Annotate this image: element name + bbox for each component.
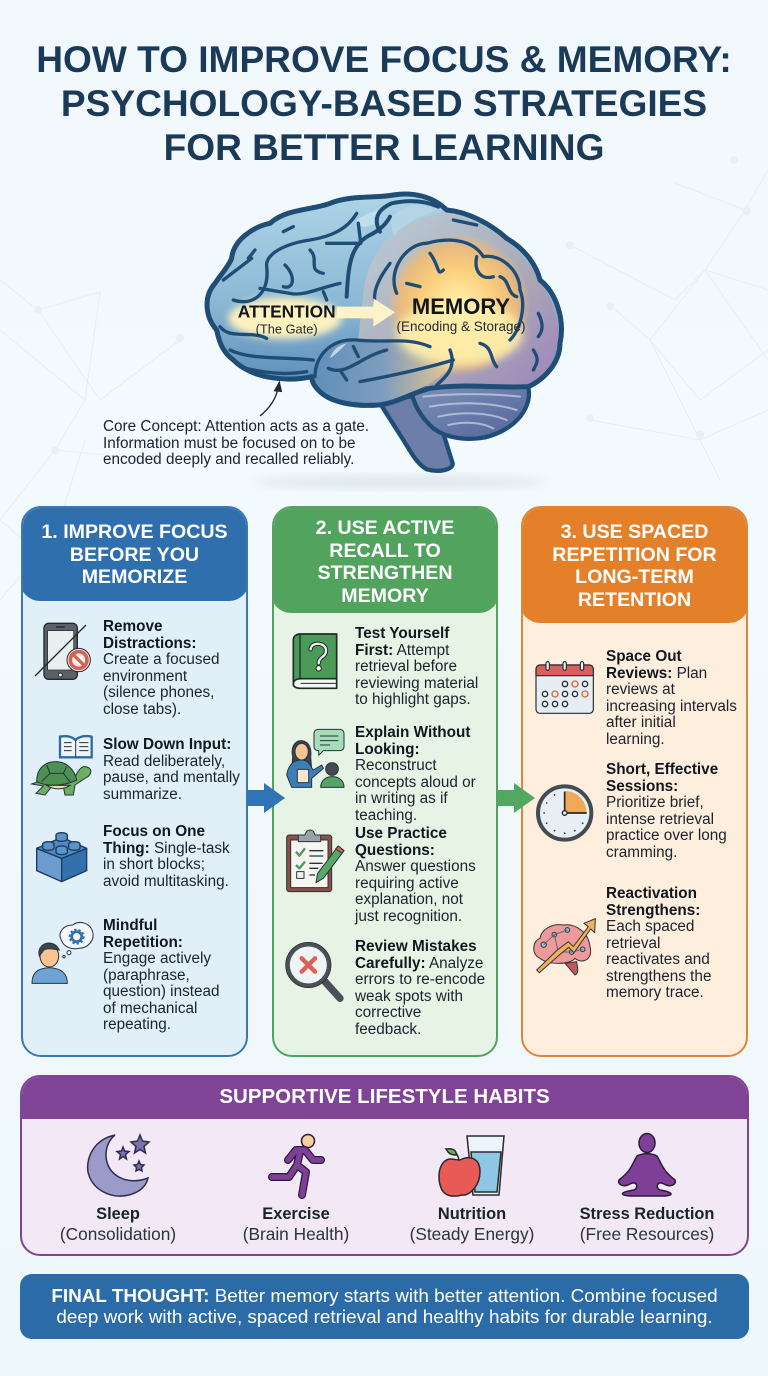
text: short effective sessions: practice over long [606, 827, 727, 844]
text: review mistakes [355, 938, 485, 1038]
icon: magnifier with x [286, 942, 340, 998]
text: short effective sessions: intense retrieval [606, 810, 714, 828]
heading: improve focus: BEFORE YOU [70, 544, 199, 566]
text: mindful repetition: Repetition: [103, 934, 183, 950]
attention label: (The Gate) [256, 321, 318, 336]
icon: moon and stars [88, 1135, 149, 1196]
core concept text: encoded deeply and recalled reliably. [103, 451, 354, 468]
text: short effective sessions: Short, Effective [606, 761, 718, 778]
text: explain without looking [355, 724, 476, 824]
icon: runner [272, 1134, 321, 1195]
attention label [238, 301, 336, 336]
brain illustration [204, 192, 564, 490]
text: test yourself [355, 625, 478, 708]
text: space out reviews: Space Out [606, 648, 682, 665]
icon: question book [293, 634, 337, 688]
text: sleep: Sleep [96, 1205, 140, 1223]
text: mindful repetition: Engage actively [103, 950, 211, 967]
icon: turtle with book [32, 736, 92, 795]
cerebrum [207, 194, 561, 405]
heading: active recall: STRENGTHEN [318, 562, 452, 584]
background network pattern [0, 156, 768, 600]
text: review mistakes: weak spots with [355, 988, 463, 1004]
text: mindful repetition [103, 917, 220, 1033]
icon: clipboard and pencil [287, 830, 344, 892]
text: test yourself: reviewing material [355, 674, 478, 692]
text: focus on one thing [103, 823, 230, 890]
text: review mistakes: Carefully: Analyze [355, 954, 483, 972]
text: space out reviews: Reviews: Plan [606, 664, 707, 682]
text: mindful repetition: (paraphrase, [103, 966, 190, 984]
text: space out reviews: learning. [606, 730, 665, 748]
text: space out reviews: reviews at [606, 681, 675, 698]
ground shadow [253, 476, 547, 488]
text: nutrition: (Steady Energy) [410, 1224, 534, 1244]
core concept text: Core Concept: Attention acts as a gate. [103, 418, 369, 435]
text: slow down input [103, 736, 240, 802]
heading: improve focus [20, 505, 249, 601]
heading: spaced repetition: RETENTION [578, 588, 691, 610]
icons: column 2 [285, 633, 344, 1002]
text: explain without looking: Explain Without [355, 724, 470, 741]
text: explain without looking: teaching. [355, 806, 417, 824]
text: focus on one thing: in short blocks; [103, 856, 205, 873]
text: sleep: (Consolidation) [60, 1224, 176, 1244]
text: reactivation strengthens [606, 885, 711, 1001]
final thought banner [20, 1274, 749, 1339]
text: remove distractions: Create a focused [103, 651, 220, 668]
final thought banner: deep work with active, spaced retrieval and healthy habits for durable learning. [56, 1307, 713, 1328]
text: focus on one thing: Focus on One [103, 823, 205, 840]
text: use practice questions: explanation, not [355, 891, 463, 908]
text: test yourself: retrieval before [355, 658, 457, 675]
heading: improve focus: 1. IMPROVE FOCUS [41, 521, 228, 543]
icon: phone with no sign [35, 623, 90, 679]
icon: brain growth [534, 919, 595, 975]
text: test yourself: to highlight gaps. [355, 691, 471, 708]
text: space out reviews: after initial [606, 714, 676, 731]
heading: spaced repetition [520, 505, 749, 623]
text: mindful repetition: question) instead [103, 983, 220, 1000]
text: use practice questions: Answer questions [355, 858, 476, 875]
text: space out reviews [606, 648, 737, 748]
text: short effective sessions: Prioritize brief, [606, 794, 704, 811]
icon: clock [538, 786, 591, 840]
icon: apple and water glass [439, 1136, 504, 1196]
arrow: core concept pointer [260, 382, 281, 416]
text: remove distractions: Remove [103, 618, 163, 635]
heading: active recall: 2. USE ACTIVE [316, 517, 454, 539]
text: reactivation strengthens: reactivates and [606, 951, 710, 968]
heading: spaced repetition: REPETITION FOR [552, 544, 717, 566]
brain stem and cerebellum [380, 383, 529, 471]
text: short effective sessions [606, 761, 727, 860]
heading: lifestyle [19, 1074, 750, 1119]
text: mindful repetition: Mindful [103, 917, 157, 934]
text: exercise: Exercise [262, 1205, 330, 1223]
text: use practice questions: just recognition. [355, 908, 462, 924]
text: remove distractions: environment [103, 668, 187, 684]
core concept text [103, 418, 369, 468]
text: remove distractions: (silence phones, [103, 684, 214, 701]
attention label: ATTENTION [238, 301, 336, 321]
title: HOW TO IMPROVE FOCUS & MEMORY: [36, 38, 732, 80]
panel: spaced repetition [521, 506, 748, 1057]
gyri lines [220, 201, 542, 385]
icons: column 3 [533, 661, 596, 976]
text: review mistakes: errors to re-encode [355, 971, 485, 988]
core concept text: Information must be focused on to be [103, 434, 356, 452]
icon: meditation [619, 1134, 675, 1196]
text: focus on one thing: Thing: Single-task [103, 840, 230, 856]
heading: active recall [271, 505, 499, 613]
title: PSYCHOLOGY-BASED STRATEGIES [61, 82, 707, 124]
title [36, 38, 732, 168]
text: review mistakes: feedback. [355, 1020, 421, 1038]
heading: active recall: MEMORY [341, 584, 429, 606]
text: explain without looking: concepts aloud or [355, 774, 476, 790]
memory label: MEMORY [412, 294, 510, 319]
icon: person thinking [32, 923, 93, 983]
text: remove distractions [103, 618, 220, 718]
text: use practice questions: requiring active [355, 874, 459, 892]
text: nutrition [410, 1205, 534, 1244]
text: reactivation strengthens: Reactivation [606, 885, 697, 902]
text: exercise: (Brain Health) [243, 1224, 349, 1244]
text: exercise [243, 1205, 349, 1244]
text: stress reduction: Stress Reduction [580, 1205, 714, 1223]
icons: column 1 [30, 622, 94, 984]
text: mindful repetition: repeating. [103, 1016, 171, 1033]
heading: improve focus: MEMORIZE [82, 566, 187, 588]
text: review mistakes: Review Mistakes [355, 938, 477, 955]
text: explain without looking: Reconstruct [355, 757, 437, 774]
text: slow down input: pause, and mentally [103, 769, 240, 786]
text: remove distractions: close tabs). [103, 700, 181, 718]
text: space out reviews: increasing intervals [606, 698, 737, 714]
heading: spaced repetition: LONG-TERM [575, 566, 694, 588]
text: explain without looking: in writing as if [355, 790, 448, 807]
text: use practice questions: Use Practice [355, 825, 447, 842]
text: reactivation strengthens: retrieval [606, 934, 660, 952]
text: review mistakes: corrective [355, 1004, 421, 1021]
text: test yourself: First: Attempt [355, 642, 449, 658]
text: test yourself: Test Yourself [355, 625, 449, 642]
title: FOR BETTER LEARNING [164, 126, 604, 168]
icon: calendar [536, 662, 593, 713]
text: remove distractions: Distractions: [103, 634, 196, 652]
text: mindful repetition: of mechanical [103, 1000, 197, 1016]
text: stress reduction [580, 1205, 714, 1244]
text: stress reduction: (Free Resources) [580, 1224, 714, 1244]
final thought banner: FINAL THOUGHT: Better memory starts with better attention. Combine focused [51, 1286, 718, 1307]
text: slow down input: Slow Down Input: [103, 736, 231, 753]
panel: supportive lifestyle habits [20, 1075, 749, 1256]
text: reactivation strengthens: memory trace. [606, 984, 704, 1001]
text: short effective sessions: cramming. [606, 844, 677, 860]
heading: lifestyle: SUPPORTIVE LIFESTYLE HABITS [219, 1085, 550, 1108]
text: use practice questions: Questions: [355, 842, 435, 858]
text: reactivation strengthens: Each spaced [606, 918, 694, 935]
heading: spaced repetition: 3. USE SPACED [561, 521, 708, 543]
heading: active recall: RECALL TO [329, 540, 441, 562]
text: reactivation strengthens: Strengthens: [606, 902, 700, 918]
icon: lego block [37, 833, 87, 882]
arrow: attention to memory [337, 298, 395, 327]
text: short effective sessions: Sessions: [606, 778, 678, 794]
text: explain without looking: Looking: [355, 740, 420, 758]
text: nutrition: Nutrition [438, 1205, 506, 1223]
text: use practice questions [354, 825, 476, 924]
text: reactivation strengthens: strengthens the [606, 968, 711, 984]
panel: improve focus [21, 506, 248, 1057]
icon: teacher explaining [287, 729, 344, 787]
text: slow down input: summarize. [103, 786, 182, 802]
memory label [396, 294, 526, 334]
memory label: (Encoding & Storage) [396, 319, 526, 334]
text: slow down input: Read deliberately, [103, 752, 225, 770]
text: focus on one thing: avoid multitasking. [103, 872, 229, 890]
panel: active recall [272, 506, 498, 1057]
text: sleep [60, 1205, 176, 1244]
